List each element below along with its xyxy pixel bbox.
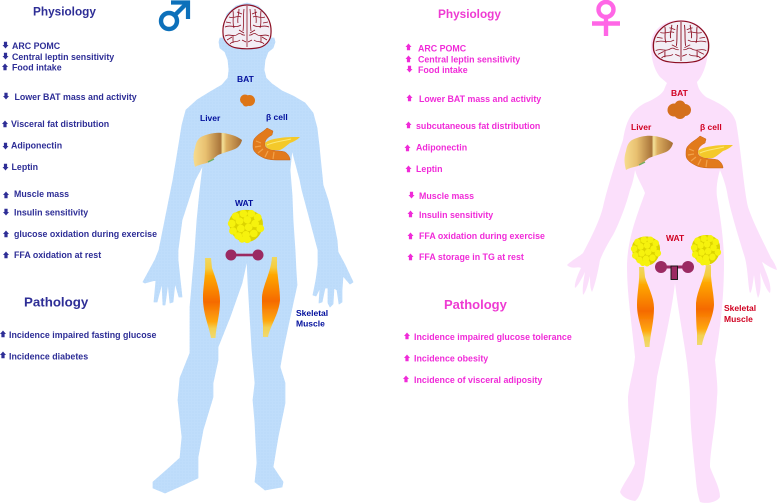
- list: male physiology: ARC POMC: [12, 41, 61, 51]
- icon: female left thigh muscle: [637, 267, 654, 347]
- list: male physiology: Leptin: [12, 162, 38, 172]
- icon: female pancreas: [686, 136, 733, 168]
- icon: male white adipose tissue: [228, 210, 264, 243]
- icon: female right adipose tissue: [691, 235, 721, 266]
- list: female physiology: FFA storage in TG at rest: [419, 252, 524, 262]
- list: male pathology: Incidence diabetes: [9, 352, 88, 362]
- list: female pathology: Incidence of visceral adiposity: [414, 375, 542, 385]
- list: female physiology: Lower BAT mass and activity: [419, 94, 541, 104]
- list: male physiology: FFA oxidation at rest: [14, 250, 101, 260]
- heading: female physiology: Physiology: [438, 7, 501, 21]
- label: male liver: Liver: [200, 113, 221, 123]
- label: male skeletal muscle: Muscle: [296, 318, 325, 328]
- list: male pathology: [0, 330, 157, 362]
- list: female physiology: [404, 44, 545, 262]
- list: female physiology: subcutaneous fat distribution: [416, 121, 540, 131]
- icon: male gonads: [226, 250, 264, 260]
- list: male physiology: Visceral fat distribution: [11, 119, 109, 129]
- icon: female BAT: [668, 100, 691, 119]
- icon: male left thigh muscle: [203, 258, 220, 338]
- icon: female reproductive organs: [655, 261, 694, 280]
- icon: male symbol: [161, 2, 188, 29]
- list: female physiology: Central leptin sensitivity: [418, 54, 520, 64]
- list: male physiology: glucose oxidation during exercise: [14, 229, 157, 239]
- list: female physiology: Leptin: [416, 164, 443, 174]
- icon: female brain: [653, 21, 709, 63]
- label: male skeletal muscle: [296, 308, 328, 328]
- icon: female symbol: [592, 2, 620, 36]
- label: female liver: Liver: [631, 122, 652, 132]
- list: female pathology: Incidence impaired glucose tolerance: [414, 332, 572, 342]
- list: male physiology: Food intake: [12, 62, 62, 72]
- icon: male pancreas: [253, 128, 300, 160]
- icon: male right thigh muscle: [262, 257, 280, 337]
- list: male physiology: Insulin sensitivity: [14, 208, 88, 218]
- label: female WAT: WAT: [666, 233, 685, 243]
- label: male BAT: BAT: [237, 74, 255, 84]
- list: female physiology: ARC POMC: [418, 44, 467, 54]
- label: male beta cell: β cell: [266, 112, 288, 122]
- label: female BAT: BAT: [671, 88, 689, 98]
- heading: male physiology: Physiology: [33, 4, 96, 18]
- heading: male pathology: Pathology: [24, 294, 89, 310]
- icon: female left adipose tissue: [631, 236, 661, 266]
- list: male pathology: Incidence impaired fasting glucose: [9, 330, 157, 340]
- label: male WAT: WAT: [235, 198, 254, 208]
- list: male physiology: Lower BAT mass and activity: [14, 92, 137, 102]
- icon: male brain: [223, 5, 271, 49]
- list: male physiology: Central leptin sensitivity: [12, 52, 114, 62]
- list: female pathology: [403, 332, 572, 385]
- icon: female liver: [624, 136, 673, 170]
- list: female physiology: Muscle mass: [419, 191, 474, 201]
- heading: female pathology: Pathology: [444, 297, 508, 312]
- label: female beta cell: β cell: [700, 122, 722, 132]
- list: female physiology: Adiponectin: [416, 142, 467, 152]
- list: female physiology: Food intake: [418, 65, 468, 75]
- list: male physiology: Muscle mass: [14, 189, 69, 199]
- female body silhouette: [567, 20, 777, 503]
- male body silhouette: [143, 3, 353, 493]
- list: male physiology: Adiponectin: [11, 140, 62, 150]
- icon: male liver: [194, 133, 242, 167]
- list: female physiology: FFA oxidation during exercise: [419, 231, 545, 241]
- list: male physiology: [2, 41, 157, 260]
- label: female skeletal muscle: [724, 303, 756, 324]
- icon: female right thigh muscle: [696, 265, 714, 345]
- list: female physiology: Insulin sensitivity: [419, 210, 493, 220]
- label: female skeletal muscle: Muscle: [724, 314, 753, 324]
- list: female pathology: Incidence obesity: [414, 354, 488, 364]
- label: female skeletal muscle: Skeletal: [724, 303, 756, 313]
- label: male skeletal muscle: Skeletal: [296, 308, 328, 318]
- icon: male BAT: [240, 94, 255, 106]
